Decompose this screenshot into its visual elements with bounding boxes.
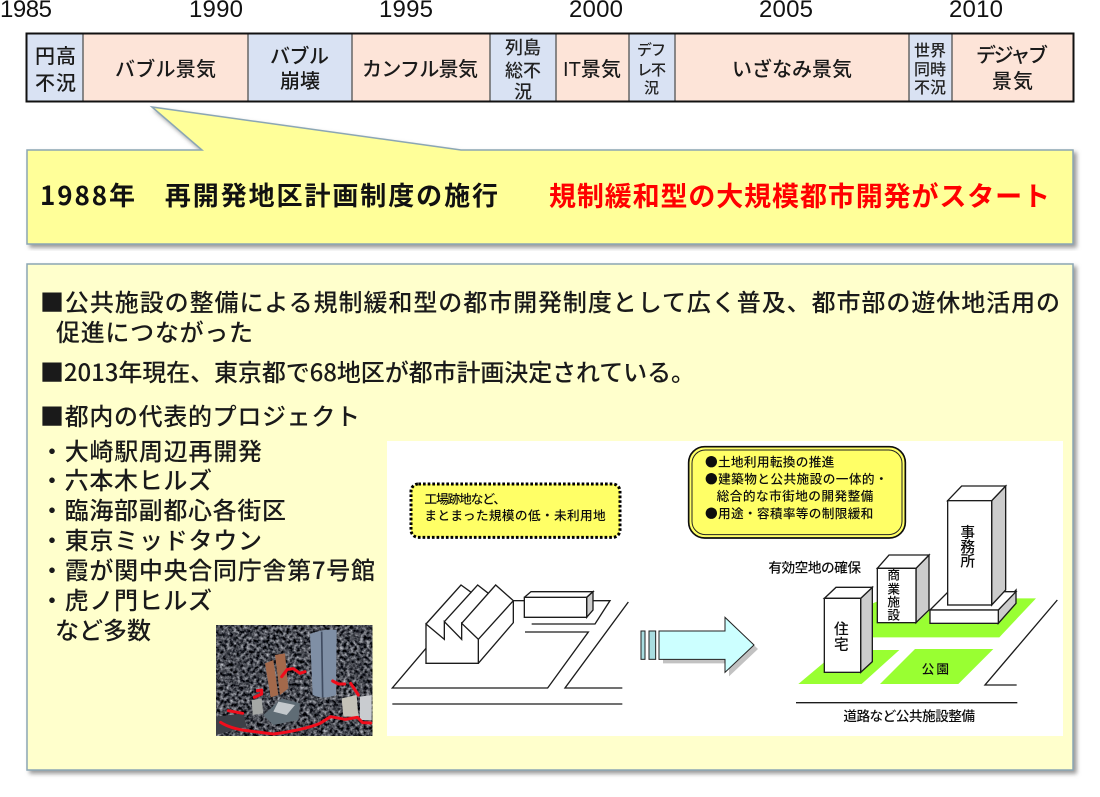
project list <box>40 439 375 645</box>
economic period timeline bar: 況 <box>644 80 659 97</box>
building: commercial: 施 <box>887 595 900 610</box>
factory building <box>426 585 513 663</box>
concept diagram <box>387 441 1063 736</box>
building: commercial <box>877 555 929 623</box>
economic period timeline bar: バブル <box>270 44 329 68</box>
project list: など多数 <box>55 618 151 645</box>
label: open space: 有効空地の確保 <box>768 561 861 576</box>
economic period timeline bar: 総不 <box>505 61 541 81</box>
bullet: 68 districts: ■2013年現在、東京都で68地区が都市計画決定されている。 <box>40 353 695 388</box>
building: commercial: 業 <box>887 581 900 596</box>
bullet: representative projects: ■都内の代表的プロジェクト <box>40 397 360 432</box>
label: redevelopment goals: ●建築物と公共施設の一体的・ <box>705 468 888 487</box>
economic period timeline bar: 況 <box>514 82 532 102</box>
label: unused land: 工場跡地など、 <box>424 491 506 506</box>
economic period timeline bar: 崩壊 <box>280 70 320 93</box>
project list: ・大崎駅周辺再開発 <box>40 439 262 466</box>
building: residence <box>824 587 872 672</box>
economic period timeline bar: 景気 <box>992 70 1033 93</box>
label: redevelopment goals: 総合的な市街地の開発整備 <box>717 489 874 504</box>
diagram: after redevelopment <box>689 447 1057 724</box>
economic period timeline bar: 列島 <box>505 38 541 58</box>
panel: details <box>27 264 1073 770</box>
economic period timeline bar: 同時 <box>914 61 946 79</box>
label: redevelopment goals <box>689 447 905 538</box>
economic period timeline bar: バブル景気 <box>115 57 216 81</box>
bullet: spread of the system: ■公共施設の整備による規制緩和型の都市開発制度として広く普及、都市部の遊休地活用の <box>40 283 1060 318</box>
arrow <box>641 617 758 676</box>
road lines <box>796 600 1057 703</box>
label: unused land: まとまった規模の低・未利用地 <box>424 508 606 523</box>
building: office: 務 <box>960 539 975 556</box>
callout: 1988 deregulation <box>27 107 1073 244</box>
building: office: 事 <box>960 524 975 541</box>
project list: ・六本木ヒルズ <box>40 468 212 495</box>
economic period timeline bar: IT景気 <box>563 58 621 81</box>
economic period timeline bar: 不況 <box>35 72 76 95</box>
label: redevelopment goals: ●土地利用転換の推進 <box>705 452 835 471</box>
bullet: spread of the system <box>40 283 1060 347</box>
label: public facilities: 道路など公共施設整備 <box>843 709 975 724</box>
label: redevelopment goals: ●用途・容積率等の制限緩和 <box>705 503 873 522</box>
label: park: 公園 <box>922 662 949 676</box>
building: residence: 宅 <box>834 636 849 653</box>
label: unused land <box>411 484 620 537</box>
economic period timeline bar: 世界 <box>914 42 946 60</box>
green open space <box>798 598 1036 684</box>
economic period timeline bar: いざなみ景気 <box>732 57 852 81</box>
year axis labels <box>0 0 1003 23</box>
project list: ・霞が関中央合同庁舎第7号館 <box>40 551 375 586</box>
callout highlight: 規制緩和型の大規模都市開発がスタート <box>549 181 1050 212</box>
project list: ・東京ミッドタウン <box>40 528 262 555</box>
economic period timeline bar: レ不 <box>637 62 666 79</box>
economic period timeline bar: デフ <box>637 41 666 59</box>
project list: ・臨海部副都心各街区 <box>40 498 286 525</box>
building: residence: 住 <box>834 621 849 638</box>
diagram: before redevelopment <box>392 484 758 704</box>
road and lot lines <box>392 601 628 704</box>
building: office <box>930 486 1016 623</box>
economic period timeline bar: 円高 <box>35 45 76 68</box>
economic period timeline bar: 不況 <box>914 79 946 97</box>
photo: Roppongi Hills aerial <box>216 625 372 736</box>
economic period timeline bar <box>26 34 1074 102</box>
building: office: 所 <box>960 553 975 570</box>
bullet: spread of the system: 促進につながった <box>56 320 253 347</box>
project list: ・虎ノ門ヒルズ <box>40 588 212 615</box>
callout heading: 1988年 再開発地区計画制度の施行 <box>40 176 498 213</box>
economic period timeline bar: カンフル景気 <box>362 58 478 81</box>
building: commercial: 商 <box>887 567 900 582</box>
building: commercial: 設 <box>887 608 900 622</box>
warehouse <box>524 592 593 617</box>
economic period timeline bar: デジャブ <box>976 43 1048 67</box>
